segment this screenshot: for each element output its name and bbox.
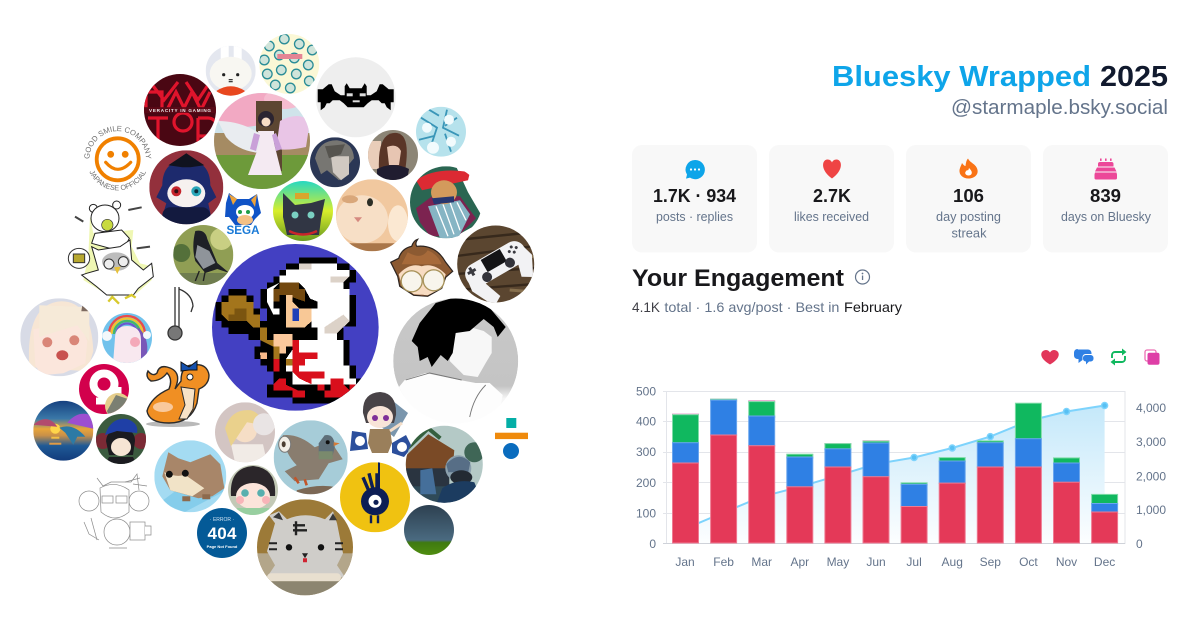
avatar: 404 page not found: 404 (208, 524, 237, 543)
bars: replies (672, 400, 1118, 512)
month labels: Aug (942, 555, 963, 569)
avatar: navy-haired chibi girl (149, 150, 223, 225)
title: Bluesky Wrapped (832, 61, 1091, 93)
right axis: 0 (1136, 537, 1143, 551)
cumulative area (686, 406, 1105, 543)
left axis: 300 (636, 445, 656, 459)
avatar: sketched bear and owl (68, 201, 153, 304)
avatar: crow on a rail (172, 225, 233, 285)
icon: birthday cake (1094, 158, 1117, 180)
avatar: pixel art white mage (212, 244, 379, 411)
stat card: days on Bluesky: 839 (1090, 186, 1121, 206)
avatar: black-haired doll (228, 465, 278, 516)
title: 2025 (1100, 61, 1168, 93)
month labels: Apr (790, 555, 809, 569)
avatar: Sonic Sega logo (225, 193, 261, 237)
avatar: starry night over green field (404, 505, 454, 555)
left axis: 400 (636, 414, 656, 428)
bars: reposts (672, 399, 1118, 504)
avatar: glasses boy sticker (391, 239, 453, 296)
left axis (636, 384, 656, 551)
avatar: pigeon with toilet roll (274, 420, 348, 497)
chart legend (1041, 348, 1160, 366)
engagement summary (632, 299, 902, 315)
left axis: 100 (636, 506, 656, 520)
avatar: brown-haired woman (368, 130, 418, 181)
avatar: blue ice crystal (416, 107, 466, 157)
avatar: blonde anime girl (20, 298, 98, 376)
stat card: posting streak: day posting (936, 209, 1001, 224)
stat card: posting streak: 106 (953, 186, 984, 206)
handle: @starmaple.bsky.social (951, 97, 1168, 119)
stat card: likes: 2.7K (813, 186, 851, 206)
stat card: days on Bluesky: days on Bluesky (1061, 209, 1151, 224)
engagement summary: 4.1K (632, 299, 661, 315)
icon: legend quotes (1145, 350, 1160, 365)
left axis: 0 (649, 537, 656, 551)
avatar: sunset with dolphin (33, 401, 93, 461)
stat card: posting streak (906, 145, 1031, 252)
avatar: Good Smile Company logo: GOOD SMILE COMPANY (84, 126, 152, 158)
avatar: teal sushi pattern (259, 34, 319, 94)
avatar: cabin and people in beanie (405, 425, 484, 504)
month labels: Jun (866, 555, 886, 569)
bars: quotes (672, 399, 890, 456)
stat card: likes (769, 145, 894, 252)
stat card: posts and replies: 1.7K · 934 (653, 186, 736, 206)
avatar: white rabbit plush (206, 43, 256, 98)
icon: legend replies (1074, 349, 1094, 364)
avatar: chibi girl with mascots (350, 392, 412, 457)
month labels: Jul (906, 555, 922, 569)
avatar: teal orange blue divide logo (495, 418, 528, 459)
stat card: days on Bluesky (1043, 145, 1168, 252)
right axis: 1,000 (1136, 503, 1166, 517)
stat card: posts and replies (632, 145, 757, 252)
month labels: Mar (751, 555, 772, 569)
month labels: Nov (1056, 555, 1077, 569)
avatar: blonde doll figure (215, 402, 275, 462)
avatar: boy in blue cap (95, 414, 149, 465)
avatar: furret plush (154, 440, 226, 512)
icon: info (856, 270, 870, 284)
avatar: red neon logo: VERACITY IN GAMING (149, 108, 211, 113)
avatar: Good Smile Company logo (84, 126, 152, 190)
avatar: music note sketch (168, 287, 193, 340)
avatar: close-up rabbit (336, 179, 408, 251)
stat card: likes: likes received (794, 209, 869, 224)
cumulative line (686, 406, 1105, 529)
icon: flame (959, 158, 978, 178)
icon: legend reposts (1110, 348, 1126, 366)
icon: chat bubble (686, 160, 705, 179)
avatar: white tiger plush (257, 499, 363, 595)
bars: likes (672, 435, 1118, 543)
month labels: Oct (1019, 555, 1038, 569)
month labels: Sep (980, 555, 1001, 569)
cumulative markers (911, 402, 1108, 460)
engagement summary: February (844, 299, 902, 315)
right axis: 4,000 (1136, 401, 1166, 415)
right axis: 3,000 (1136, 435, 1166, 449)
left axis: 200 (636, 476, 656, 490)
avatar: angel character in blossoms (210, 87, 310, 189)
avatar: 404 page not found: Page Not Found (207, 544, 238, 549)
right axis: 2,000 (1136, 470, 1166, 484)
avatar: Sonic Sega logo: SEGA (226, 223, 260, 237)
avatar: crowned black cat (273, 181, 333, 241)
engagement summary: total · 1.6 avg/post · Best in (664, 299, 839, 315)
avatar: 404 page not found (197, 508, 247, 558)
left axis: 500 (636, 384, 656, 398)
avatar: white game controller on wood (457, 226, 534, 302)
month labels: May (827, 555, 849, 569)
right axis (1136, 401, 1166, 551)
avatar: crimson number nine logo (79, 364, 129, 414)
avatar: orange dragon (146, 361, 209, 427)
stat card: posts and replies: posts · replies (656, 209, 733, 224)
chart: combined engagement (636, 384, 1166, 569)
month labels (675, 555, 1115, 569)
heading: your engagement: Your Engagement (632, 265, 844, 292)
icon: legend heart (1041, 350, 1059, 364)
avatar bubble cluster (20, 34, 534, 596)
month labels: Feb (713, 555, 734, 569)
avatar: manga profile portrait (393, 298, 518, 418)
grid lines (663, 391, 1125, 544)
avatar: yellow shirt with bird (340, 461, 410, 532)
stat card: posting streak: streak (952, 226, 987, 240)
month labels: Dec (1094, 555, 1115, 569)
icon: heart (823, 159, 841, 178)
avatar: moustached merchant (410, 166, 482, 238)
avatar: 404 page not found: · ERROR · (210, 517, 234, 523)
month labels: Jan (675, 555, 695, 569)
avatar: line sketch with beer (79, 474, 151, 548)
avatar: Good Smile Company logo: JAPANESE OFFICIAL (90, 170, 146, 190)
avatar: black pixel bat (316, 57, 396, 137)
avatar: grey-haired man (310, 137, 360, 187)
avatar: red neon logo (144, 74, 217, 146)
avatar: rainbow unicorn (102, 313, 152, 364)
